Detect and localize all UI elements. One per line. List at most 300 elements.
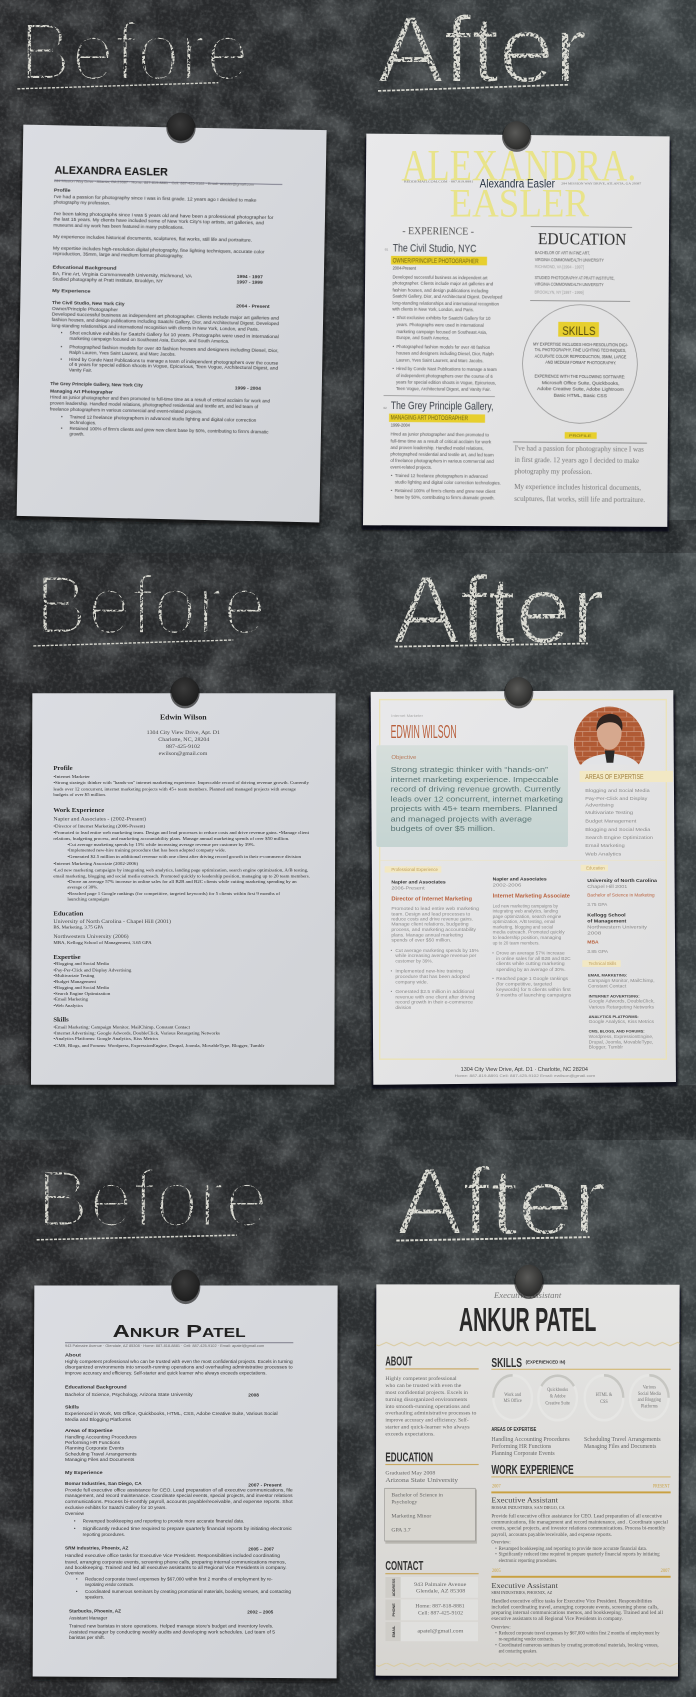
resume text: after: keywords) for 5 clients within first bbox=[496, 987, 572, 992]
work experience section: Coordinated numerous seminars by creating promotional materials, booking venues, bbox=[499, 1642, 659, 1648]
resume text: after: INTERNET ADVERTISING: bbox=[589, 994, 640, 998]
left column: about, education, contact: Arizona State University bbox=[385, 1478, 459, 1484]
education, skills and profile column: PROFILE bbox=[569, 434, 592, 438]
work experience section: • bbox=[495, 1551, 497, 1557]
resume text: before: •Multivariate Testing bbox=[53, 973, 95, 978]
experience column: 2004-Present bbox=[393, 265, 417, 271]
resume text: before: negotiating vendor contracts. bbox=[85, 1582, 134, 1587]
experience column: 02 bbox=[383, 406, 387, 410]
experience column: Shot exclusive exhibits for Saatchi Gallery for 10 bbox=[397, 315, 491, 321]
resume text: after: ANALYTICS PLATFORMS: bbox=[589, 1015, 639, 1019]
resume text: after: revenue with one client after driving bbox=[395, 994, 476, 1000]
left column: about, education, contact: PHONE bbox=[391, 1603, 396, 1616]
resume text: before: the last 15 years. My clients have included some of New York City's top artists, art galleries, and bbox=[53, 217, 265, 225]
resume text: after: Blogging and Social Media bbox=[585, 827, 651, 833]
resume text: before: Significantly reduced time required to prepare quarterly financial reports by initiating electronic bbox=[83, 1526, 293, 1531]
resume text: before: 1994 - 1997 bbox=[237, 274, 263, 280]
header bbox=[459, 1291, 596, 1338]
resume text: before: Trained 12 freelance photographers in advanced studio lighting and digital color correction bbox=[70, 414, 257, 423]
resume text: before: fashion houses, and design publications including Saatchi Gallery, Dior, and Architectural Digest. Developed bbox=[52, 317, 280, 326]
skills section: SKILLS bbox=[491, 1355, 522, 1370]
icon: magnet bbox=[166, 113, 196, 143]
education, skills and profile column: My experience includes historical documents, bbox=[514, 484, 641, 492]
zigzag rule: top bbox=[376, 1341, 680, 1348]
left column: about, education, contact: ADDRESS bbox=[391, 1578, 396, 1596]
education, skills and profile column: in first grade. 12 years ago I decided to make bbox=[514, 457, 639, 465]
skill circle: Various Social Media and Blogging Platforms: and Blogging bbox=[638, 1398, 662, 1403]
panel: Alexandra Easler after bbox=[361, 0, 671, 532]
resume text: after: in online sales for all B2B and B2C bbox=[496, 956, 571, 961]
resume text: after: Budget Management bbox=[585, 818, 637, 824]
resume text: before: Starbucks, Phoenix, AZ bbox=[69, 1608, 121, 1614]
timeline: 2007 to present: PRESENT bbox=[653, 1483, 670, 1489]
experience column: Trained 12 freelance photographers in advanced bbox=[395, 473, 488, 479]
resume text: before: 1997 - 1999 bbox=[237, 279, 263, 285]
resume text: before: exclusive exhibits for Saatchi Gallery for 10 years. bbox=[65, 1505, 167, 1510]
resume text: before: 1304 City View Drive, Apt. D1 bbox=[147, 730, 220, 736]
resume text: before: • bbox=[61, 426, 63, 431]
resume text: before: •Reached page 1 Google rankings (for competitive, targeted keywords) for 5 clients within first 9 months of bbox=[67, 891, 281, 897]
resume header: REDDEMAILCOM.COM · 887.819.8881 bbox=[404, 179, 474, 184]
resume text: after: Bachelor of Science in Marketing bbox=[587, 892, 655, 897]
resume text: before: 2002 – 2005 bbox=[247, 1609, 274, 1614]
skill circle: Quickbooks and Adobe Creative Suite: Creative Suite bbox=[545, 1401, 570, 1406]
work experience section: WORK EXPERIENCE bbox=[491, 1462, 574, 1477]
work experience section: preparing internal communications memos, and bookkeeping. Trained and led all bbox=[491, 1610, 664, 1616]
resume text: before: 2008 bbox=[248, 1392, 259, 1398]
resume text: before: •Search Engine Optimization bbox=[53, 991, 111, 996]
icon: magnet bbox=[502, 121, 531, 152]
experience column: photographer. Clients include major art galleries and bbox=[392, 280, 494, 286]
skill circle: Word and MS Office bbox=[493, 1375, 532, 1420]
resume text: before: Bachelor of Science, Psychology, Arizona State University bbox=[65, 1392, 193, 1397]
work experience section bbox=[491, 1462, 671, 1654]
education, skills and profile column: BACHELOR OF ART IN FINE ART, bbox=[535, 250, 590, 256]
skill circle: Word and MS Office: Work and bbox=[504, 1393, 522, 1398]
resume text: before: management, and record maintenance. Coordinate special events, special projects, and investor relations bbox=[65, 1493, 293, 1498]
experience column: of freelance photographers in various commercial and bbox=[390, 458, 494, 464]
work experience section: BOMAR INDUSTRIES, SAN DIEGO, CA bbox=[491, 1506, 565, 1511]
resume text: after: Northwestern University bbox=[587, 924, 648, 930]
resume text: after: optimization, A/B testing, email bbox=[493, 919, 555, 924]
resume text: before: Media and Blogging Platforms bbox=[65, 1417, 132, 1422]
education, skills and profile column: STUDIED PHOTOGRAPHY AT PRATT INSTITUTE, bbox=[535, 275, 615, 281]
resume text: after: Manage client relations, budgeting bbox=[391, 921, 469, 927]
resume text: after: Education bbox=[586, 866, 605, 871]
left column: about, education, contact: CONTACT bbox=[385, 1558, 424, 1573]
resume text: before bbox=[53, 714, 310, 1049]
timeline: 2007 to present: 2007 bbox=[492, 1483, 501, 1489]
resume text: after: customer by 39%. bbox=[395, 959, 433, 964]
paper shadow bbox=[31, 1289, 339, 1682]
resume text: before: disorganized environments into smooth-running operations and overhauling administrative processes to bbox=[65, 1364, 293, 1370]
experience column: studio lighting and digital color correction technologies. bbox=[395, 480, 501, 486]
panel: Ankur Patel before bbox=[31, 1154, 339, 1682]
paper bbox=[33, 1285, 338, 1678]
resume text: after: media outreach. Promoted quickly bbox=[493, 929, 565, 935]
paper bbox=[363, 134, 670, 527]
icon: magnet bbox=[514, 1265, 544, 1299]
band: areas of expertise bbox=[580, 771, 673, 782]
resume text: before: •Implemented new-hire training procedure that has been adopted company wide. bbox=[67, 847, 226, 853]
resume text: after: Internet Marketing Associate bbox=[493, 893, 570, 900]
resume text: before: photography my profession. bbox=[54, 200, 110, 206]
resume text: after: and managed projects with average bbox=[391, 815, 532, 823]
resume text: before: Coordinated numerous seminars by creating promotional materials, booking venues, and contacting bbox=[85, 1589, 291, 1594]
resume text: before: •Internet Marketing Associate (2002-2006) bbox=[53, 861, 139, 866]
skills section: Managing Files and Documents bbox=[584, 1444, 656, 1450]
resume text: before: reporting procedures. bbox=[83, 1532, 125, 1537]
resume header: Alexandra Easler bbox=[480, 177, 555, 191]
resume text: after: Advertising bbox=[585, 803, 614, 809]
left column: about, education, contact: Glendale, AZ 85308 bbox=[416, 1588, 466, 1595]
skill circle: HTML and CSS: CSS bbox=[600, 1400, 608, 1405]
left column: about, education, contact: EDUCATION bbox=[385, 1450, 433, 1465]
resume text: after: reduce costs and drive revenue gains. bbox=[391, 917, 473, 922]
resume text: before: 2005 – 2007 bbox=[248, 1546, 274, 1552]
resume text: before: •Analytics Platforms: Google Analytics, Kiss Metrics bbox=[53, 1036, 159, 1042]
resume text: before: Educational Background bbox=[65, 1384, 127, 1390]
experience column: The Grey Principle Gallery, bbox=[391, 400, 494, 413]
resume text: before: Work Experience bbox=[53, 808, 105, 814]
skills section: (EXPERIENCED IN) bbox=[526, 1359, 566, 1364]
work experience section: executive assistants to all Regional Vice Presidents in company. bbox=[491, 1616, 623, 1621]
resume text: after: Campaign Monitor, MailChimp, bbox=[588, 978, 655, 983]
resume text: before: baristas per shift. bbox=[69, 1635, 105, 1640]
experience column: with clients in New York, London, and Paris. bbox=[392, 307, 474, 312]
resume text: after: Technical Skills bbox=[589, 961, 616, 966]
resume text: after: Blogger, Tumblr bbox=[589, 1045, 624, 1050]
resume text: after: Blogging and Social Media bbox=[585, 788, 650, 794]
left column: about, education, contact: overhauling administrative processes to bbox=[385, 1410, 477, 1417]
left column: about, education, contact: Graduated May 2008 bbox=[385, 1470, 436, 1477]
resume text: before: I've had a passion for photography since I was in first grade. 12 years ago I decided to make bbox=[54, 194, 257, 203]
experience column: 01 bbox=[385, 248, 388, 252]
education, skills and profile column: photography my profession. bbox=[514, 468, 592, 476]
education, skills and profile column: sculptures, flat works, still life and portraiture. bbox=[514, 496, 645, 504]
education, skills and profile column: EXPERIENCE WITH THE FOLLOWING SOFTWARE: bbox=[535, 373, 625, 379]
paper bbox=[31, 693, 336, 1085]
resume text: before: 887-425-9102 bbox=[166, 744, 200, 750]
experience column: and proven leadership. Handled model relations, bbox=[390, 445, 484, 451]
resume text: after: Reached page 1 Google rankings bbox=[496, 976, 569, 981]
education, skills and profile column: ACCURATE COLOR REPRODUCTION, 35MM, LARGE bbox=[535, 353, 627, 359]
resume text: before: Handled executive office tasks for Executive Vice President. Responsibilities included coordinating bbox=[65, 1553, 281, 1558]
resume text: before: growth. bbox=[69, 431, 84, 437]
resume text: before: Managing Files and Documents bbox=[65, 1457, 135, 1462]
resume text: before: Ankur Patel bbox=[113, 1321, 246, 1341]
resume text: after: Chapel Hill 2001 bbox=[587, 884, 628, 890]
resume text: before: My experience includes historical documents, sculptures, flat works, still life and portraiture. bbox=[53, 234, 252, 242]
resume text: after: team. Design and lead processes to bbox=[391, 911, 471, 916]
work experience section: Handled executive office tasks for Executive Vice President. Responsibilities bbox=[491, 1598, 652, 1604]
resume text: before: • bbox=[61, 344, 63, 349]
resume text: before: Hired by Conde Nast Publications to manage a team of independent photographers over the course bbox=[69, 357, 279, 366]
resume text: after: 3.75 GPA bbox=[587, 902, 608, 907]
experience column: Developed successful business as independent art bbox=[393, 274, 488, 280]
resume text: after: of Management bbox=[587, 918, 627, 924]
work experience section: communications, file management and record maintenance, and . Coordinate special bbox=[491, 1519, 669, 1526]
resume text: before: •Internet Marketer bbox=[53, 774, 91, 779]
resume text: after: MBA bbox=[587, 939, 600, 944]
chalk heading: Before: Before bbox=[37, 1154, 268, 1245]
left column: about, education, contact: Marketing Minor bbox=[391, 1513, 432, 1520]
resume text: before: Northwestern University (2006) bbox=[53, 933, 129, 940]
resume header: ALEXANDRA. bbox=[401, 141, 636, 190]
work experience section: • bbox=[495, 1642, 497, 1647]
paper shadow bbox=[369, 694, 678, 1089]
resume text: before: My Experience bbox=[52, 288, 91, 295]
chalk heading: Before: Before bbox=[19, 6, 249, 98]
resume text: before: •Promoted to lead entire web marketing team. Design and lead processes to reduce costs and drive revenue gains. •Manage client bbox=[53, 830, 310, 835]
work experience section: re-negotiating vendor contracts. bbox=[499, 1636, 554, 1642]
education, skills and profile column: VIRGINIA COMMONWEALTH UNIVERSITY bbox=[535, 282, 604, 287]
resume text: before: 2004 - Present bbox=[236, 304, 270, 309]
resume text: before: Skills bbox=[53, 1018, 69, 1024]
experience column: Hired as junior photographer and then promoted to bbox=[391, 432, 490, 438]
resume text: after: 2006-Present bbox=[391, 885, 425, 891]
experience column: MANAGING ART PHOTOGRAPHER bbox=[391, 414, 468, 422]
resume text: before: • bbox=[76, 1576, 78, 1582]
resume text: after: • bbox=[391, 989, 393, 994]
resume text: before: freelance photographers in various commercial and event-related projects. bbox=[50, 406, 203, 414]
resume text: before: The Civil Studio, New York City bbox=[52, 300, 125, 307]
resume text: before: reproduction, 35mm, large and medium format photography. bbox=[53, 251, 183, 258]
resume text: after: Web Analytics bbox=[585, 851, 622, 857]
resume text: before: • bbox=[60, 357, 62, 362]
resume text: after: CMS, BLOGS, AND FORUMS: bbox=[589, 1029, 645, 1034]
resume header: EASLER bbox=[450, 180, 589, 225]
left column: about, education, contact: turning disorganized environments bbox=[385, 1397, 467, 1403]
experience column: Lauren, Yves Saint Laurent, and Marc Jacobs. bbox=[396, 357, 484, 363]
resume text: before: Managing Art Photographer bbox=[50, 388, 113, 395]
resume text: before: Handling Accounting Procedures bbox=[65, 1434, 137, 1439]
panel: Edwin Wilson before bbox=[29, 559, 337, 1089]
left column: about, education, contact: apatel@gmail.com bbox=[417, 1628, 463, 1635]
resume text: after: clients while cutting marketing bbox=[496, 961, 565, 966]
resume text: before: •Drove an average 57% increase in online sales for all B2B and B2C clients while cutting marketing spending by an bbox=[67, 879, 297, 884]
resume text: before: Shot exclusive exhibits for Saatchi Gallery for 10 years. Photographs were used in international bbox=[69, 330, 279, 339]
resume text: after: 9 months of launching campaigns bbox=[496, 992, 572, 997]
resume text: before: improve accuracy and efficiency. Self-starter and quick learner who always exceeds expectations. bbox=[65, 1370, 267, 1376]
resume text: before: Owner/Principle Photographer bbox=[52, 306, 118, 312]
resume text: after: division bbox=[395, 1005, 412, 1010]
resume text: before: proven leadership. Handled model relations, photographed residential and textile art, and led team of bbox=[50, 400, 259, 409]
resume text: after: while increasing average revenue per bbox=[395, 953, 477, 958]
work experience section: payroll, accounts payable/receivable, and expense reports. bbox=[491, 1532, 612, 1538]
header: Executive Assistant bbox=[493, 1291, 562, 1300]
paper bbox=[371, 690, 676, 1085]
resume text: before: Ralph Lauren, Yves Saint Laurent, and Marc Jacobs. bbox=[69, 350, 176, 357]
resume text: before: • bbox=[76, 1589, 78, 1594]
resume text: after: integrating web analytics, landing bbox=[493, 908, 559, 914]
resume text: after: up to 20 team members. bbox=[493, 940, 540, 945]
work experience section: included coordinating travel, arranging corporate events, screening phone calls, bbox=[491, 1604, 659, 1610]
resume text: before: 1999 - 2004 bbox=[235, 385, 261, 391]
resume text: after: page optimization, search engine bbox=[493, 914, 562, 919]
resume text: before: MBA, Kellogg School of Management, 3.65 GPA bbox=[53, 940, 153, 946]
resume text: before: Educational Background bbox=[53, 264, 117, 272]
resume text: before: ALEXANDRA EASLER bbox=[54, 165, 168, 179]
resume text: after: process, and marketing accountability bbox=[391, 927, 477, 932]
skill circle: HTML and CSS bbox=[585, 1375, 623, 1420]
resume text: after: Napier and Associates bbox=[391, 879, 446, 885]
objective box bbox=[376, 745, 568, 847]
work experience section: SRM INDUSTRIES, PHOENIX, AZ bbox=[491, 1591, 552, 1596]
experience column: of independent photographers over the course of 6 bbox=[396, 373, 493, 379]
skills section: Performing HR Functions bbox=[491, 1443, 551, 1450]
skill circle: Various Social Media and Blogging Platforms: Social Media bbox=[638, 1392, 662, 1397]
skills section: Planning Corporate Events bbox=[491, 1451, 555, 1457]
skill circle: Various Social Media and Blogging Platforms bbox=[630, 1375, 669, 1420]
skill circle: Word and MS Office: MS Office bbox=[503, 1399, 522, 1404]
work experience section: Provide full executive office assistance for CEO. Lead preparation of all executive bbox=[491, 1513, 662, 1519]
resume text: before: Areas of Expertise bbox=[65, 1428, 113, 1433]
resume text: before: leads over 12 concurrent, internet marketing projects with 45+ team members. Planned and managed projects with average bbox=[53, 786, 296, 793]
resume text: after: Promoted to lead entire web marketing bbox=[391, 906, 480, 911]
resume text: after: marketing, blogging and social bbox=[493, 924, 553, 929]
resume text: before: Overview bbox=[65, 1511, 85, 1516]
resume text: after: procedure that has been adopted bbox=[395, 974, 470, 979]
education, skills and profile column: Adobe Creative Suite, Adobe Lightroom bbox=[537, 386, 624, 392]
resume text: before: About bbox=[65, 1352, 82, 1357]
resume text: before: •Director of Internet Marketing (2006-Present) bbox=[53, 823, 146, 828]
experience column: photographed residential and textile art, and led team bbox=[390, 452, 494, 458]
left column: about, education, contact: Bachelor of Science in bbox=[391, 1491, 444, 1499]
education, skills and profile column: RICHMOND, VA [1994 - 1997] bbox=[535, 264, 584, 269]
resume text: after: spending by an average of 30%. bbox=[496, 967, 566, 972]
resume text: before: technologies. bbox=[70, 420, 96, 425]
left column: about, education, contact: exceeds expectations. bbox=[385, 1431, 435, 1437]
experience column: - EXPERIENCE - bbox=[402, 226, 475, 238]
resume text: before: Education bbox=[53, 912, 84, 918]
experience column: Hired by Conde Nast Publications to manage a team bbox=[396, 366, 497, 372]
experience column: • bbox=[391, 473, 393, 478]
resume text: before: Profile bbox=[53, 766, 73, 772]
resume text: before bbox=[65, 1321, 293, 1640]
resume text: after: leads over 12 concurrent, internet marketing bbox=[391, 795, 563, 803]
work experience section: Revamped bookkeeping and reporting to provide more accurate financial data. bbox=[499, 1546, 647, 1551]
left column: about, education, contact: ABOUT bbox=[385, 1354, 413, 1369]
skill circle: Quickbooks and Adobe Creative Suite: Quickbooks bbox=[547, 1388, 568, 1393]
resume text: before: email marketing, blogging and social media outreach. Promoted quickly to leadership position, managing up to 20 team members. bbox=[53, 873, 310, 880]
work experience section: events, special projects, and investor relations communications. Process bi-monthly bbox=[491, 1525, 666, 1532]
resume text: before: Trained new baristas in store operations. Helped manage store's budget and inventory levels. bbox=[69, 1623, 273, 1628]
resume text: before: I've been taking photographs since I was 5 years old and have been a professional photographer for bbox=[53, 211, 274, 220]
skill circle: HTML and CSS: HTML & bbox=[596, 1393, 613, 1398]
resume text: after: plans. Manage annual marketing bbox=[391, 932, 464, 937]
resume text: after: Constant Contact bbox=[588, 984, 627, 989]
experience column: • bbox=[393, 344, 395, 349]
resume text: before: •CMS, Blogs, and Forums: Wordpress, ExpressionEngine, Drupal, Joomla, MovableType, Blogger, Tumblr bbox=[53, 1043, 265, 1049]
left column: about, education, contact: most confidential projects. Excels in bbox=[385, 1389, 469, 1396]
education, skills and profile column: MY EXPERTISE INCLUDES HIGH-RESOLUTION DIGI- bbox=[533, 341, 629, 347]
resume text: after: 2008 bbox=[587, 931, 602, 937]
resume text: before: • bbox=[74, 1526, 76, 1531]
resume text: before: Reduced corporate travel expenses by $67,000 within first 2 months of employment by re- bbox=[85, 1576, 273, 1582]
resume text: before: marketing campaign focused on Southeast Asia, Europe, and South America. bbox=[69, 336, 229, 344]
left column: about, education, contact: EMAIL bbox=[391, 1625, 396, 1637]
resume text: before: Revamped bookkeeping and reporting to provide more accurate financial data. bbox=[83, 1518, 244, 1523]
work experience section: Overview: bbox=[491, 1624, 511, 1630]
resume text: before: Retained 100% of firm's clients and grew new client base by 50%, contributing to firm's dramatic bbox=[69, 426, 269, 435]
resume text: before: •Cut average marketing spends by 15% while increasing average revenue per customer by 39%. bbox=[67, 842, 255, 847]
experience column: event-related projects. bbox=[390, 465, 432, 470]
skills section: Handling Accounting Procedures bbox=[491, 1437, 570, 1443]
experience column: Photographed fashion models for over 40 fashion bbox=[396, 344, 491, 350]
left column: about, education, contact: Cell: 887-425-9102 bbox=[418, 1610, 464, 1617]
education, skills and profile column: AND MEDIUM FORMAT PHOTOGRAPHY. bbox=[545, 360, 616, 365]
resume header bbox=[401, 141, 642, 225]
resume text: before: My expertise includes high-resolution digital photography, fine lighting techniques, accurate color bbox=[53, 245, 265, 254]
work experience section: electronic reporting procedures. bbox=[499, 1558, 557, 1563]
resume text: before: museums and my work has been featured in many publications. bbox=[53, 222, 184, 230]
skills section: Scheduling Travel Arrangements bbox=[584, 1437, 661, 1443]
left column: about, education, contact: GPA 3.7 bbox=[391, 1527, 411, 1533]
paper bbox=[376, 1284, 680, 1676]
resume text: before: 2007 - Present bbox=[248, 1482, 282, 1487]
left column: about, education, contact: into smooth-running operations and bbox=[385, 1404, 470, 1410]
resume text: after: Internet Marketer bbox=[391, 714, 423, 718]
timeline: 2005 to 2007: 2007 bbox=[661, 1568, 671, 1573]
resume text: before: •Web Analytics bbox=[53, 1003, 83, 1008]
resume text: after bbox=[380, 714, 666, 1078]
resume text: before: Planning Corporate Events bbox=[65, 1445, 125, 1451]
resume text: before: •Led new marketing campaigns by integrating web analytics, landing page optimization, search engine optimization, A/B testing, bbox=[53, 867, 308, 874]
resume text: after: • bbox=[492, 976, 494, 981]
resume text: before: and bookkeeping. Trained and led all executive assistants to all Regional Vice Presidents in company. bbox=[65, 1565, 287, 1570]
timeline: 2007 to present bbox=[491, 1483, 671, 1493]
resume text: before: 284 Mission Way Drive · Atlanta, GA 29387 · Home: 887-819-8881 · Cell: 887-425-9102 · Email: aeasler@gmail.com bbox=[54, 179, 254, 187]
resume text: after: Strong strategic thinker with “hands-on” bbox=[391, 766, 549, 774]
education, skills and profile column: BROOKLYN, NY [1997 - 1999] bbox=[535, 289, 584, 295]
resume text: before: Performing HR Functions bbox=[65, 1440, 121, 1445]
work experience section: • bbox=[495, 1546, 497, 1551]
education, skills and profile column bbox=[512, 226, 649, 504]
resume text: before: •Blogging and Social Media bbox=[53, 961, 109, 966]
resume text: after: 2002-2006 bbox=[493, 882, 522, 889]
resume text: before: •Strong strategic thinker with "hands-on" internet marketing experience. Impeccable record of driving revenue growth. Currently bbox=[53, 780, 310, 785]
decorative frame bbox=[380, 700, 666, 1059]
work experience section: Executive Assistant bbox=[491, 1496, 558, 1505]
icon: magnet bbox=[170, 677, 200, 708]
resume text: before: • bbox=[61, 414, 63, 419]
resume text: after: • bbox=[492, 951, 494, 956]
resume text: after: Napier and Associates bbox=[493, 877, 547, 883]
resume text: before: Studied photography at Pratt Institute, Brooklyn, NY bbox=[52, 276, 163, 284]
resume text: after: to leadership position, managing bbox=[493, 935, 562, 940]
left column: about, education, contact bbox=[385, 1354, 479, 1641]
work experience section: Significantly reduced time required to prepare quarterly financial reports by initiating bbox=[499, 1551, 660, 1557]
experience column: marketing campaign focused on Southeast Asia, bbox=[396, 329, 487, 335]
resume text: after: Various Retargeting Networks bbox=[589, 1004, 655, 1009]
resume text: after: EDWIN WILSON bbox=[391, 722, 457, 742]
resume text: after: projects with 45+ team members. Planned bbox=[391, 805, 557, 813]
resume text: after: • bbox=[391, 968, 393, 974]
resume text: before: speakers. bbox=[85, 1594, 104, 1599]
resume text: before: travel, arranging corporate events, screening phone calls, preparing internal communications memos, bbox=[65, 1559, 286, 1564]
resume text: after: Generated $2.5 million in additional bbox=[395, 989, 474, 994]
panel: Ankur Patel after bbox=[374, 1148, 681, 1681]
education, skills and profile column: I've had a passion for photography since I was bbox=[515, 445, 644, 454]
skill circle: Various Social Media and Blogging Platforms: Various bbox=[643, 1385, 656, 1391]
resume text: before: BS, Marketing, 3.75 GPA bbox=[53, 925, 104, 931]
education, skills and profile column: EDUCATION bbox=[538, 229, 626, 249]
resume header: 284 MISSION WAY DRIVE, ATLANTA, GA 29387 bbox=[561, 182, 642, 187]
resume text: before: • bbox=[74, 1518, 76, 1523]
resume text: before: •Email Marketing: Campaign Monitor, MailChimp, Constant Contact bbox=[53, 1025, 191, 1031]
experience column: Teen Vogue, Architectural Digest, and Vanity Fair. bbox=[396, 386, 491, 392]
